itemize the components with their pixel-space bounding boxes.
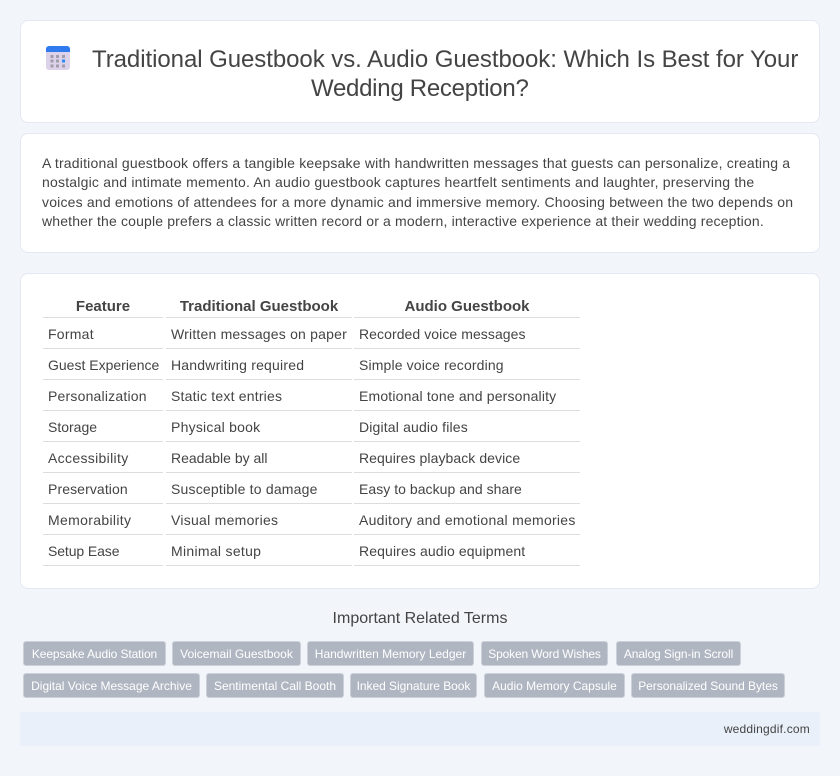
tag: Voicemail Guestbook: [180, 647, 293, 661]
footer source: weddingdif.com: [724, 722, 810, 736]
table header: [76, 298, 530, 315]
tag: [23, 641, 166, 666]
row: Storage: Physical book: [171, 419, 260, 435]
row: Guest Experience: [48, 357, 504, 373]
row: Personalization: Emotional tone and personality: [359, 388, 556, 404]
row: Guest Experience: Simple voice recording: [359, 357, 504, 373]
intro text: nostalgic and intimate memento. An audio guestbook captures heartfelt sentiments and laughter, preserving the: [42, 174, 754, 190]
row: Preservation: Susceptible to damage: [171, 481, 318, 497]
intro text: voices and emotions of attendees for a more dynamic and immersive memory. Choosing between the two depends on: [42, 194, 793, 210]
row: Preservation: Easy to backup and share: [359, 481, 522, 497]
tag: Personalized Sound Bytes: [638, 679, 778, 693]
row: Format: [48, 326, 526, 342]
tag: [307, 641, 474, 666]
tag: [206, 673, 344, 698]
table header: Audio Guestbook: [404, 298, 530, 315]
row: Storage: Digital audio files: [359, 419, 468, 435]
tag: [481, 641, 608, 666]
tag: [350, 673, 477, 698]
row: Preservation: Preservation: [48, 481, 128, 497]
row: Memorability: Memorability: [48, 512, 131, 528]
intro text: [42, 155, 793, 229]
tag: [23, 673, 200, 698]
table header: Traditional Guestbook: [180, 298, 338, 315]
tag: [484, 673, 625, 698]
panel: comparison table: [20, 273, 820, 589]
title: Traditional Guestbook vs. Audio Guestbook: Which Is Best for Your: [92, 46, 798, 73]
tag: Inked Signature Book: [357, 679, 470, 693]
row: Setup Ease: [48, 543, 526, 559]
tag: Handwritten Memory Ledger: [315, 647, 466, 661]
icon: calendar: [46, 46, 70, 70]
row: Storage: [48, 419, 468, 435]
panel: title header: [20, 20, 820, 123]
tag: [172, 641, 301, 666]
row: Format: Written messages on paper: [171, 326, 347, 342]
heading: related terms: Important Related Terms: [333, 610, 507, 627]
row: Memorability: [48, 512, 576, 528]
table header: Feature: [76, 298, 130, 315]
tag: Sentimental Call Booth: [214, 679, 336, 693]
tag: [631, 673, 785, 698]
row: Format: Recorded voice messages: [359, 326, 526, 342]
tag: Digital Voice Message Archive: [31, 679, 192, 693]
row: Accessibility: Readable by all: [171, 450, 268, 466]
row: Personalization: Personalization: [48, 388, 147, 404]
row: Personalization: Static text entries: [171, 388, 282, 404]
footer: [20, 712, 820, 746]
row: Personalization: [48, 388, 556, 404]
row: Format: Format: [48, 326, 94, 342]
title: [92, 46, 798, 102]
tag: [616, 641, 741, 666]
row: Setup Ease: Minimal setup: [171, 543, 261, 559]
title: Wedding Reception?: [311, 75, 529, 102]
row: Setup Ease: Setup Ease: [48, 543, 119, 559]
row: Setup Ease: Requires audio equipment: [359, 543, 525, 559]
related terms tags: [23, 641, 785, 698]
intro text: whether the couple prefers a classic written record or a modern, interactive experience at their wedding reception.: [42, 213, 764, 229]
panel: introduction: [20, 133, 820, 253]
row: Memorability: Auditory and emotional memories: [359, 512, 576, 528]
row: Accessibility: Accessibility: [48, 450, 129, 466]
row: Storage: Storage: [48, 419, 97, 435]
row: Guest Experience: Guest Experience: [48, 357, 159, 373]
row: Accessibility: [48, 450, 520, 466]
tag: Audio Memory Capsule: [492, 679, 617, 693]
tag: Analog Sign-in Scroll: [624, 647, 733, 661]
row: Memorability: Visual memories: [171, 512, 278, 528]
row: Preservation: [48, 481, 522, 497]
tag: Spoken Word Wishes: [488, 647, 601, 661]
intro text: A traditional guestbook offers a tangible keepsake with handwritten messages that guests can personalize, creating a: [42, 155, 790, 171]
table: [43, 298, 580, 566]
row: Guest Experience: Handwriting required: [171, 357, 304, 373]
row: Accessibility: Requires playback device: [359, 450, 520, 466]
tag: Keepsake Audio Station: [32, 647, 157, 661]
